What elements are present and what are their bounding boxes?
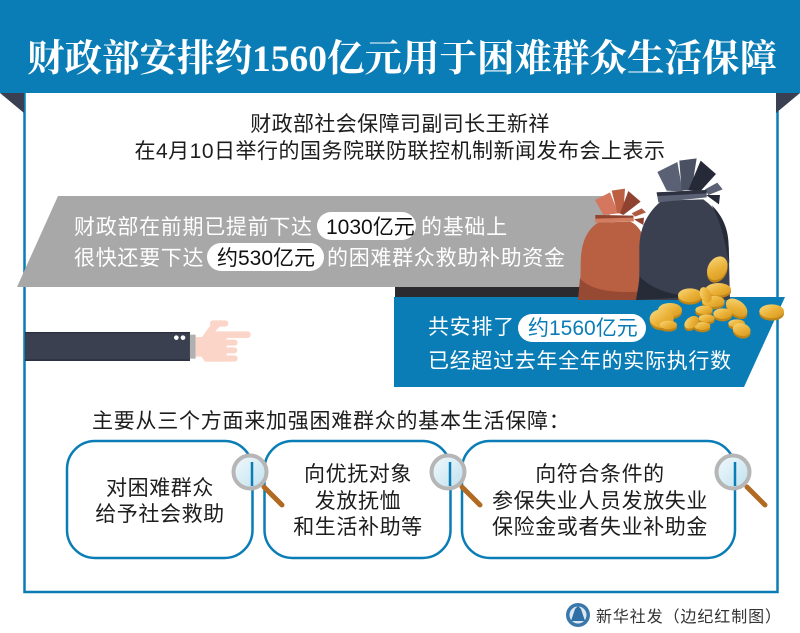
icon: pointing hand with sleeve [25,320,251,362]
content frame [24,90,778,592]
left ribbon fold [0,93,24,113]
blue banner line 1 [428,314,646,342]
panel text: 向优抚对象 [304,463,412,486]
panel text: 对困难群众 [106,477,214,500]
icon: magnifier 3 [716,456,765,505]
panel text: 参保失业人员发放失业 [492,490,708,513]
blue banner line 1: 约1560亿元 [528,317,638,340]
panel text: 给予社会救助 [95,503,225,526]
panel text [492,463,708,539]
panel text [95,477,225,526]
icon: gold coins [650,253,784,340]
icon: magnifier 2 [432,456,480,505]
grey banner line 2: 很快还要下达 [74,247,204,270]
title banner: 财政部安排约1560亿元用于困难群众生活保障 [27,38,777,80]
panel: social aid [67,441,252,558]
icon: money bags [578,158,730,300]
panel text: 保险金或者失业补助金 [492,516,708,539]
intro text: 在4月10日举行的国务院联防联控机制新闻发布会上表示 [134,140,666,163]
grey banner line 2: 的困难群众救助补助资金 [327,247,566,270]
icon: brown bag [578,189,646,300]
panel: grey banner [17,196,610,297]
right ribbon fold [776,93,800,113]
title banner [0,0,800,93]
intro text [134,113,666,163]
icon: magnifier 1 [234,456,282,505]
panel text: 发放抚恤 [315,490,401,513]
blue banner line 2: 已经超过去年全年的实际执行数 [428,350,732,373]
grey banner line 1 [74,212,508,240]
grey banner line 2: 约530亿元 [217,247,315,270]
panel text: 和生活补助等 [293,516,423,539]
icon: Xinhua logo [566,603,590,627]
grey banner line 2 [74,243,566,271]
icon: dark bag [636,158,730,300]
panel text [293,463,423,539]
panel: blue banner [394,297,785,387]
credit: 新华社发（边纪红制图） [596,608,782,626]
grey banner line 1: 的基础上 [421,216,508,239]
grey banner line 1: 1030亿元 [326,216,415,239]
panel text: 向符合条件的 [535,463,665,486]
panel: special care recipients [264,441,450,558]
grey banner line 1: 财政部在前期已提前下达 [74,216,313,239]
intro text: 财政部社会保障司副司长王新祥 [250,113,550,136]
section heading: 主要从三个方面来加强困难群众的基本生活保障： [92,410,570,433]
panel: unemployment support [462,441,735,558]
blue banner line 1: 共安排了 [428,316,515,339]
